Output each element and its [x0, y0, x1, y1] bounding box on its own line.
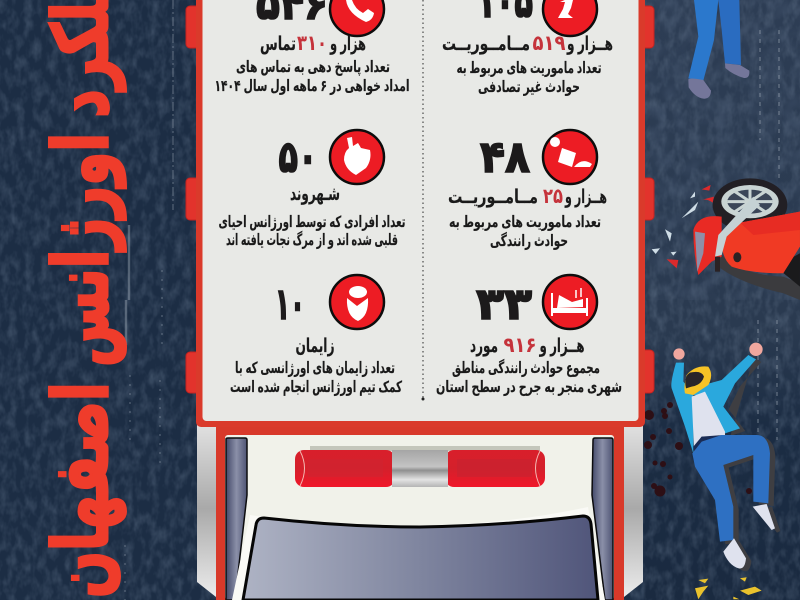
heading: driving missions count: هــزار و	[564, 187, 607, 208]
icon: hospital bed	[543, 275, 597, 329]
icon: heart	[330, 130, 384, 184]
illustration: yellow debris	[695, 577, 762, 599]
heading: calls count: هزار و	[329, 34, 366, 55]
icon: swaddled baby	[330, 275, 384, 329]
stat: resuscitated citizens: تعداد افرادی که توسط اورژانس احیای	[218, 214, 406, 231]
heading: accidents count: ۹۱۶	[504, 334, 536, 357]
icon: overturned car	[543, 130, 597, 184]
heading: calls count: تماس	[260, 34, 296, 55]
illustration: legs of injured person	[688, 0, 749, 99]
ambulance side windows	[226, 438, 613, 600]
heading: accidents count: مورد	[470, 336, 498, 357]
stat: resuscitated citizens: قلبی شده اند و از مرگ نجات یافته اند	[226, 231, 398, 249]
red side tabs of ambulance	[186, 6, 654, 393]
stat: answered calls	[214, 0, 410, 95]
heading: accidents count	[470, 334, 584, 357]
icon: injured figure	[543, 0, 597, 36]
illustration: crashed motorcycle	[693, 178, 800, 300]
illustration: broken glass shards	[652, 185, 714, 268]
stat: childbirths	[230, 275, 403, 396]
stat: total injury accidents: ۳۳	[476, 280, 532, 329]
heading: calls count	[260, 32, 366, 55]
stat: answered calls: تعداد پاسخ دهی به تماس های	[236, 59, 390, 77]
stat: driving accident missions: تعداد ماموریت های مربوط به	[449, 214, 601, 231]
stat: childbirths: تعداد زایمان های اورژانسی که با	[235, 360, 395, 377]
heading: missions count: مــامــوریــت	[442, 34, 530, 55]
icon: phone	[330, 0, 384, 36]
stat: driving accident missions	[448, 130, 607, 250]
heading: calls count: ۳۱۰	[297, 32, 327, 55]
stat: resuscitated citizens: شـهروند	[290, 184, 340, 205]
stat: total injury accidents: مجموع حوادث رانندگی مناطق	[452, 358, 600, 377]
stat: non-traffic missions: تعداد ماموریت های مربوط به	[456, 60, 602, 77]
info panel	[196, 0, 645, 427]
ambulance body	[197, 415, 643, 600]
stat: childbirths: ۱۰	[275, 280, 305, 329]
heading: missions count	[442, 32, 613, 55]
stat: total injury accidents	[436, 275, 622, 396]
illustration: falling motorcyclist	[671, 343, 780, 571]
stat: childbirths: زایمان	[296, 336, 334, 357]
stat: answered calls: امداد خواهی در ۶ ماهه اول سال ۱۴۰۴	[214, 78, 410, 95]
stat: non-traffic missions	[442, 0, 613, 96]
illustration: blood splatter	[644, 402, 752, 496]
stat: non-traffic missions: حوادث غیر تصادفی	[478, 79, 580, 96]
stat: childbirths: کمک تیم اورژانس انجام شده است	[230, 379, 403, 396]
stat: driving accident missions: ۴۸	[480, 133, 530, 182]
ambulance windshield	[232, 507, 605, 600]
heading: missions count: هــزار و	[566, 34, 613, 55]
stat: resuscitated citizens: ۵۰	[278, 133, 318, 182]
heading: driving missions count	[448, 185, 607, 208]
heading: missions count: ۵۱۹	[532, 32, 566, 55]
stat: resuscitated citizens	[218, 130, 406, 249]
ambulance roof light bar	[295, 446, 545, 487]
stat: driving accident missions: حوادث رانندگی	[490, 231, 568, 250]
heading: accidents count: هــزار و	[539, 336, 584, 357]
heading: driving missions count: مــامــوریــت	[448, 187, 538, 208]
heading: driving missions count: ۲۵	[543, 185, 563, 208]
stat: total injury accidents: شهری منجر به جرح در سطح استان	[436, 379, 622, 396]
